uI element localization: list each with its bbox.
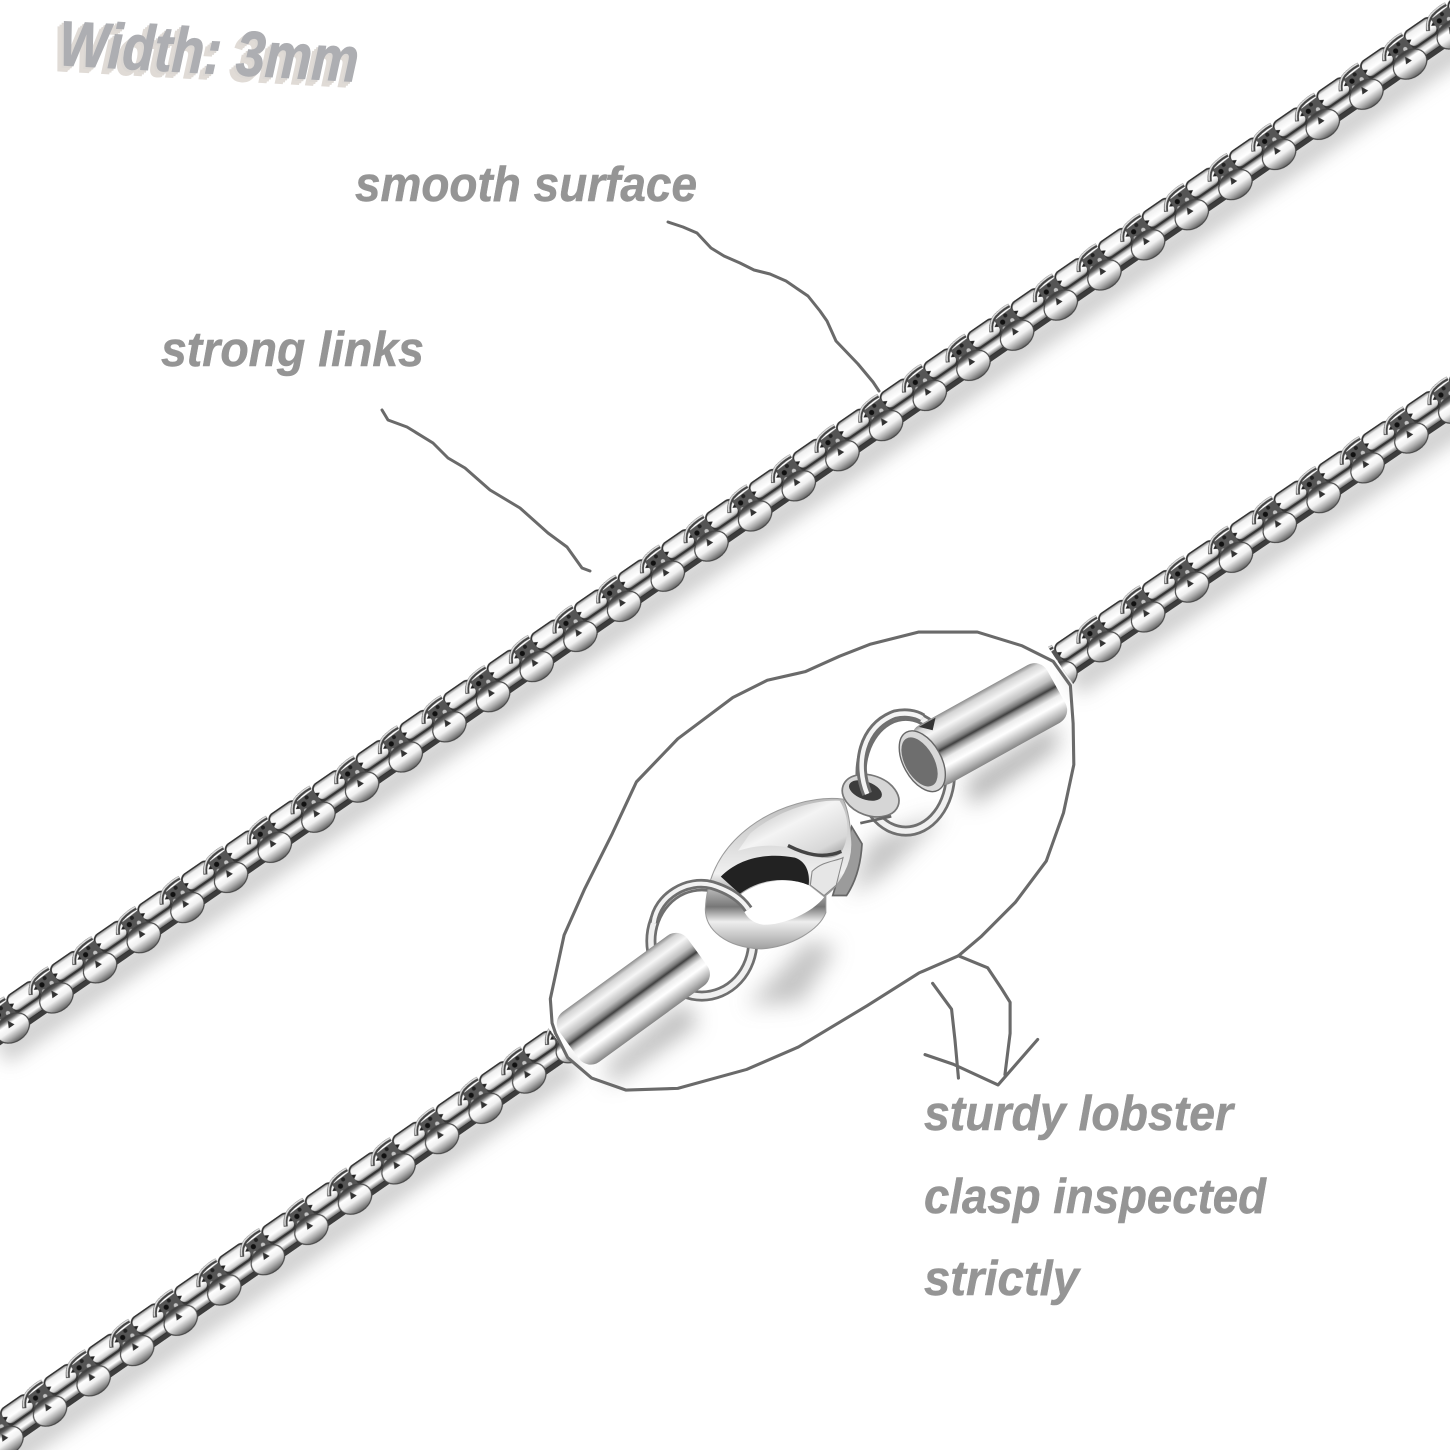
label: width 3mm 3D title: Width: 3mm xyxy=(57,8,361,96)
hand-drawn arrow xyxy=(925,956,1038,1085)
lower clasp barrel xyxy=(551,927,716,1070)
clasp body xyxy=(705,798,852,949)
label: smooth surface: smooth surface xyxy=(355,158,697,212)
upper chain strand xyxy=(0,0,1450,1054)
hand-drawn clasp loop xyxy=(550,632,1074,1090)
label: strong links: strong links xyxy=(161,323,424,377)
label: width 3mm 3D title: Width: 3mm xyxy=(55,10,359,98)
lower right chain strand xyxy=(1047,365,1450,685)
lower ring front hook xyxy=(654,884,748,923)
upper jump ring xyxy=(861,715,951,831)
label: width 3mm 3D title: Width: 3mm xyxy=(53,12,357,100)
label: sturdy lobster clasp inspected strictly: strictly xyxy=(924,1252,1082,1306)
lower jump ring xyxy=(651,886,753,996)
connector eye xyxy=(836,767,905,824)
lobster clasp assembly xyxy=(550,632,1074,1090)
label: sturdy lobster clasp inspected strictly: clasp inspected xyxy=(924,1170,1267,1224)
pointer line: smooth surface xyxy=(668,222,879,391)
clasp dark opening xyxy=(721,856,809,894)
label: sturdy lobster clasp inspected strictly: sturdy lobster xyxy=(924,1087,1236,1141)
pointer line: strong links xyxy=(382,410,590,571)
label: width 3mm 3D title: Width: 3mm xyxy=(51,13,354,101)
lower left chain strand xyxy=(0,1026,574,1450)
clasp lever highlight xyxy=(810,858,843,896)
clasp hole xyxy=(741,880,824,925)
clasp rear tail xyxy=(833,827,862,896)
label: sturdy lobster clasp inspected strictly xyxy=(924,1087,1267,1306)
upper ring front stroke xyxy=(862,714,922,794)
lobe shadow edge xyxy=(788,846,841,855)
clasp upper lobe xyxy=(738,801,847,858)
clasp shadows xyxy=(609,723,1057,1085)
upper clasp barrel xyxy=(890,658,1072,799)
